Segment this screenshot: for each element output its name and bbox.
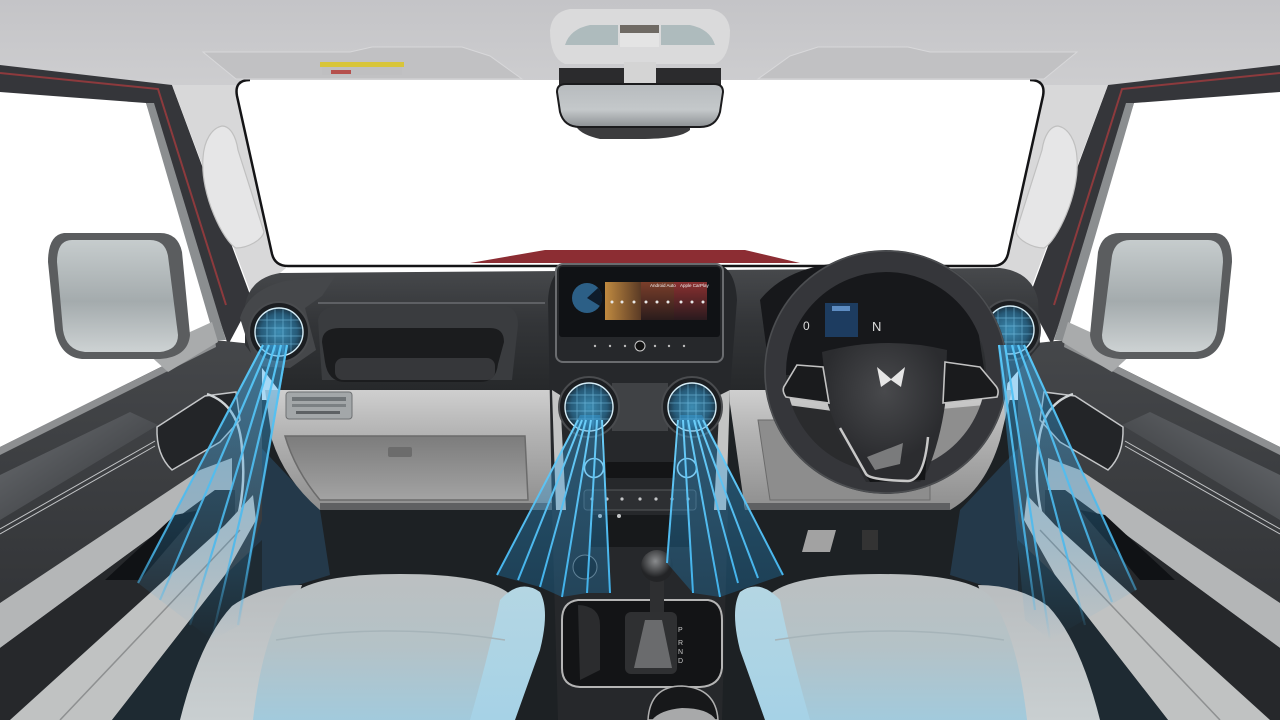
instrument cluster: N (872, 319, 881, 334)
airbag (822, 343, 947, 482)
console bezel with gear lever: D (678, 658, 683, 665)
red tile 2 (674, 282, 707, 320)
sun visor left (203, 47, 522, 79)
sun visor right (758, 47, 1077, 79)
right vent (980, 300, 1040, 360)
instrument cluster: 0 (803, 319, 810, 333)
right A pillar (994, 65, 1280, 345)
console bezel with gear lever (562, 550, 722, 720)
steering wheel hood (760, 262, 985, 375)
dashboard upper (245, 268, 1040, 392)
instrument cluster (803, 303, 881, 337)
centre vents (559, 377, 722, 437)
grab handle left (203, 126, 264, 248)
airflow centre-right vent (667, 415, 783, 597)
airflow right vent (998, 345, 1136, 640)
rear-view mirror (557, 84, 723, 139)
left controls (783, 365, 829, 403)
orange tile (605, 282, 641, 320)
handle (157, 392, 240, 470)
badge plate (286, 392, 352, 419)
pedals (802, 530, 878, 552)
blue floor shade right (950, 420, 1055, 600)
console bezel with gear lever: N (678, 649, 683, 656)
right door (1018, 340, 1280, 720)
window switch pocket (0, 490, 235, 720)
gray dash seen through wheel (925, 405, 985, 478)
right side window (1065, 92, 1280, 447)
blue floor shade left (225, 420, 330, 600)
left A pillar (0, 65, 286, 345)
left side window (0, 92, 215, 447)
logo (877, 367, 905, 387)
climate knobs (584, 458, 696, 478)
overhead console (550, 9, 730, 86)
left vent (240, 275, 336, 368)
warning sticker (320, 62, 404, 75)
lower spoke (838, 428, 928, 482)
left door (0, 340, 262, 720)
infotainment screen (556, 264, 723, 362)
right seat (735, 574, 1100, 720)
centre stack (548, 264, 737, 720)
right lower dash (728, 390, 1012, 510)
wing mirror left (48, 233, 218, 372)
carbon panel (612, 383, 668, 431)
home button strip (635, 341, 645, 351)
wing mirror right (1062, 233, 1232, 372)
footwell (230, 400, 1050, 720)
left seat (180, 574, 545, 720)
sill (10, 495, 256, 720)
console bezel with gear lever: P (678, 627, 683, 634)
red hood (470, 250, 800, 263)
armrest strip (0, 458, 232, 648)
grab handle right (1016, 126, 1077, 248)
right controls (943, 362, 998, 403)
airflow left vent (138, 345, 288, 640)
infotainment screen: Apple CarPlay (680, 283, 710, 288)
airflow centre-left vent (497, 415, 610, 597)
glovebox panel (265, 390, 552, 510)
infotainment screen: Android Auto (650, 283, 676, 288)
windshield (237, 80, 1043, 266)
console bezel with gear lever: R (678, 640, 683, 647)
nav tile (572, 283, 602, 313)
red tile 1 (641, 282, 674, 320)
steering wheel (765, 251, 1007, 493)
headliner roof (0, 0, 1280, 110)
